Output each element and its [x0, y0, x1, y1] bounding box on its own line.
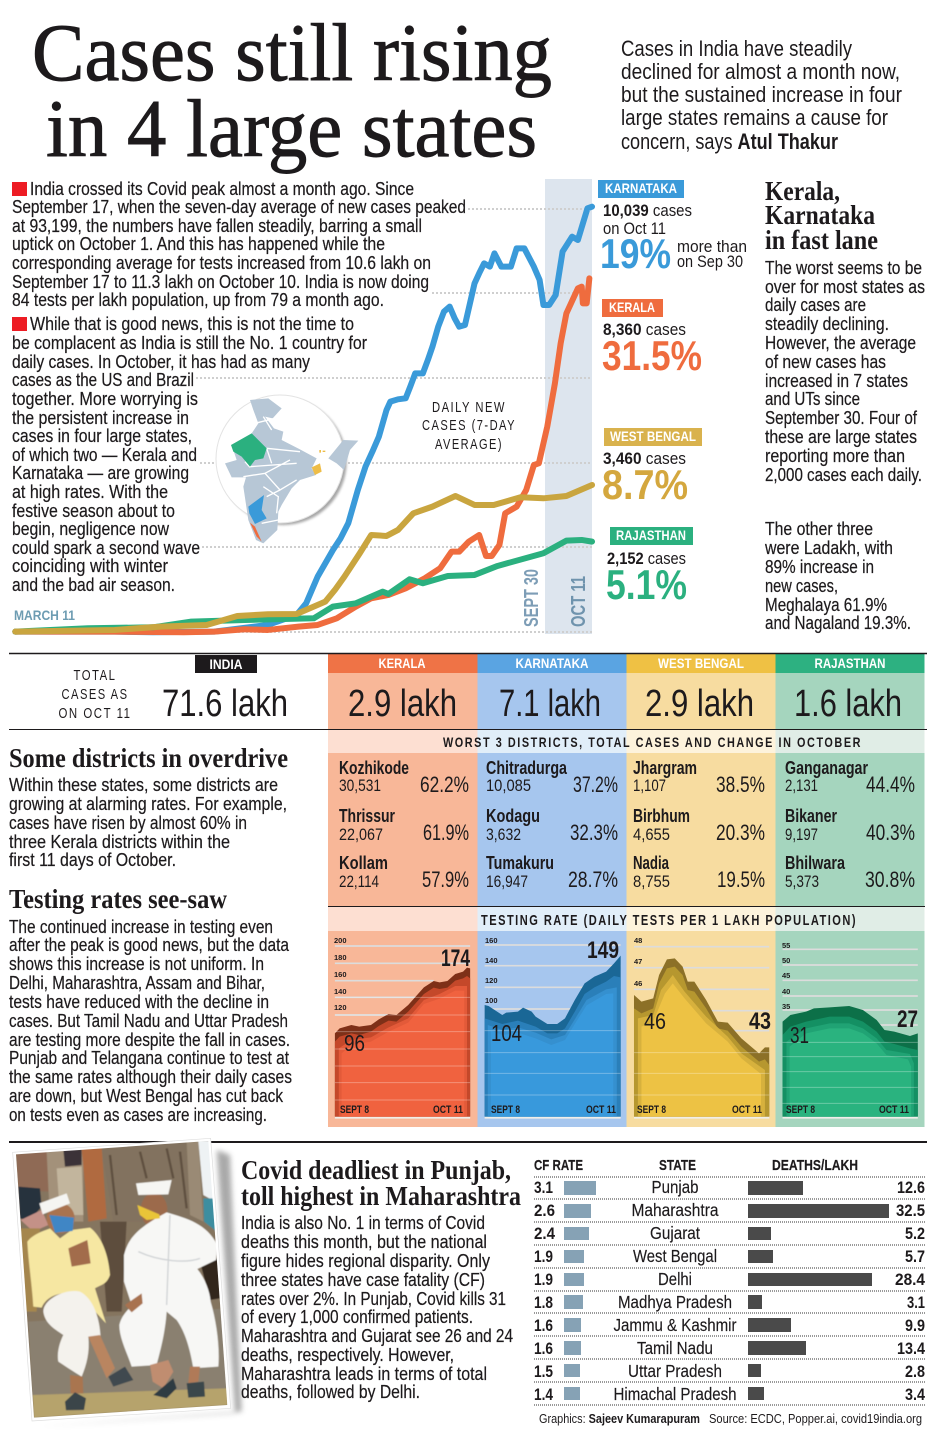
text block: body copy 1: India crossed its Covid peak almost a month ago. Since — [30, 179, 414, 199]
text block: testing rates: cases. But Tamil Nadu and Uttar Pradesh — [9, 1011, 288, 1031]
coloured table background — [328, 653, 924, 1127]
total cases row label — [58, 667, 132, 722]
India tag and total: 71.6 lakh — [162, 683, 288, 725]
heading: Covid deadliest in Punjab: Covid deadliest in Punjab, — [241, 1155, 511, 1185]
area chart: Kerala testing rate: 200 — [334, 936, 347, 945]
table header — [534, 1157, 858, 1174]
district list: Rajasthan: 2,131 — [785, 776, 818, 795]
district list: West Bengal: Jhargram — [633, 758, 697, 778]
district list: West Bengal: 19.5% — [717, 867, 765, 892]
side text: fast lane body: these are large states — [765, 427, 917, 447]
district list: West Bengal: 20.3% — [716, 820, 765, 845]
text block: body copy 2: and the bad air season. — [12, 575, 175, 595]
state names: Punjab — [652, 1177, 698, 1197]
deaths values: 28.4 — [895, 1270, 925, 1289]
heading: testing rates see-saw: Testing rates see-saw — [9, 884, 227, 914]
district list: Rajasthan: 40.3% — [866, 820, 915, 845]
table header: CF RATE — [534, 1157, 583, 1174]
CF rate values: 1.9 — [534, 1247, 553, 1266]
district list: Karnataka: 28.7% — [568, 867, 618, 892]
text block: body copy 2: be complacent as India is still the No. 1 country for — [12, 333, 367, 353]
district list: Karnataka: Chitradurga — [486, 758, 568, 778]
text block: testing rates: The continued increase in testing even — [9, 917, 273, 937]
total cases row label: CASES AS — [62, 686, 128, 703]
callout: Rajasthan — [606, 527, 693, 608]
area chart: Karnataka testing rate: 120 — [485, 976, 498, 985]
heading: some districts in overdrive: Some districts in overdrive — [9, 743, 288, 773]
table header: DEATHS/LAKH — [772, 1157, 858, 1174]
callout: Karnataka: 10,039 cases — [603, 201, 692, 220]
title: Cases still rising — [32, 7, 552, 98]
text block: Covid deaths: figure hides regional disparity. Only — [241, 1251, 490, 1271]
district list: Kerala: Kollam — [339, 853, 388, 873]
India tag and total: INDIA — [210, 656, 242, 672]
text block: some districts: cases have risen by almost 60% in — [9, 813, 247, 833]
callout: Rajasthan: 5.1% — [606, 561, 687, 608]
text block: body copy 1: uptick on October 1. And this has happened while the — [12, 234, 385, 254]
side text: other three: 89% increase in — [765, 557, 874, 577]
CF rate values: 1.6 — [534, 1316, 553, 1335]
heading: Covid deadliest in Punjab: toll highest in Maharashtra — [241, 1181, 521, 1211]
area chart: West Bengal testing rate: 48 — [634, 936, 642, 945]
text block: Covid deaths: India is also No. 1 in terms of Covid — [241, 1213, 485, 1233]
text block: testing rates: after the peak is good news, but the data — [9, 935, 290, 955]
area chart: Karnataka testing rate: SEPT 8 — [491, 1104, 520, 1116]
area chart: Rajasthan testing rate — [782, 941, 918, 1119]
text block: body copy 2: coinciding with winter — [12, 556, 168, 576]
deaths bars — [748, 1181, 889, 1400]
area chart: Kerala testing rate: 140 — [334, 987, 347, 996]
side heading: Kerala, Karnataka in fast lane: Kerala, — [765, 176, 840, 206]
text block: body copy 2: While that is good news, this is not the time to — [30, 314, 354, 334]
text block: Covid deaths: deaths this month, but the national — [241, 1232, 487, 1252]
callout: West Bengal: 8.7% — [602, 461, 688, 508]
side text: fast lane body: increased in 7 states — [765, 371, 908, 391]
callout: Rajasthan: RAJASTHAN — [616, 527, 686, 543]
district list: Rajasthan: 44.4% — [866, 772, 915, 797]
text block: Covid deaths: rates over 2%. In Punjab, Covid kills 31 — [241, 1289, 506, 1309]
district list: Rajasthan: Ganganagar — [785, 758, 868, 778]
text block: body copy 2 — [12, 314, 367, 595]
text block: body copy 2: begin, negligence now — [12, 519, 170, 539]
area chart: Rajasthan testing rate: SEPT 8 — [786, 1104, 815, 1116]
text block: body copy 1: corresponding average for tests increased from 10.6 lakh on — [12, 253, 431, 273]
callout: Kerala: KERALA — [609, 299, 655, 315]
chart band: Sept 30 to Oct 11 — [545, 179, 592, 634]
area chart: West Bengal testing rate: 46 — [634, 979, 642, 988]
state column: Kerala header: 2.9 lakh — [348, 683, 457, 725]
intro text: declined for almost a month now, — [621, 59, 900, 84]
line chart: daily new cases — [15, 207, 592, 632]
district list: Karnataka: 3,632 — [486, 825, 521, 844]
text block: Covid deaths — [241, 1213, 513, 1402]
table: CF rate and deaths per lakh — [534, 1157, 925, 1405]
area chart: Rajasthan testing rate: 31 — [790, 1022, 809, 1048]
CF rate bars — [564, 1181, 596, 1400]
text block: Covid deaths: Maharashtra and Gujarat see 26 and 24 — [241, 1326, 513, 1346]
state names: Tamil Nadu — [637, 1338, 713, 1358]
text block: Covid deaths: deaths, respectively. However, — [241, 1345, 454, 1365]
district list: Karnataka: 10,085 — [486, 776, 531, 795]
area chart: Karnataka testing rate: 104 — [491, 1020, 522, 1046]
text block: body copy 2: together. More worrying is — [12, 389, 198, 409]
callout: West Bengal: WEST BENGAL — [610, 428, 696, 444]
callout: Karnataka: on Oct 11 — [603, 219, 666, 238]
icon: India map locator — [216, 395, 358, 543]
area chart: Rajasthan testing rate: 40 — [782, 987, 790, 996]
district list: West Bengal: 1,107 — [633, 776, 666, 795]
text block: Covid deaths: of every 1,000 confirmed patients. — [241, 1307, 473, 1327]
text block: body copy 2: Karnataka — are growing — [12, 463, 189, 483]
chart title: daily new cases: CASES (7-DAY — [422, 417, 516, 434]
table rules — [9, 654, 927, 906]
text block: body copy 2: of which two — Kerala and — [12, 445, 197, 465]
state column: Kerala header — [348, 655, 457, 725]
state names: Uttar Pradesh — [628, 1361, 722, 1381]
area chart: Karnataka testing rate: 100 — [485, 996, 498, 1005]
district list: Karnataka: Kodagu — [486, 806, 540, 826]
text block: body copy 2: cases as the US and Brazil — [12, 370, 194, 390]
district list: Karnataka — [486, 758, 618, 892]
district list: Kerala: 30,531 — [339, 776, 381, 795]
area chart: Kerala testing rate: 174 — [441, 945, 470, 972]
state column: Kerala header: KERALA — [378, 655, 426, 671]
area chart: Rajasthan testing rate: 35 — [782, 1002, 790, 1011]
chart title: daily new cases — [422, 399, 516, 453]
text block: some districts: growing at alarming rates. For example, — [9, 794, 287, 814]
CF rate values: 1.4 — [534, 1385, 553, 1404]
deaths values: 5.2 — [905, 1224, 925, 1243]
chart axis label: Sept 30: SEPT 30 — [521, 569, 543, 627]
side text: other three: Meghalaya 61.9% — [765, 595, 887, 615]
side text: fast lane body: steadily declining. — [765, 314, 889, 334]
state names: West Bengal — [633, 1246, 717, 1266]
state column: Rajasthan header: 1.6 lakh — [794, 683, 902, 725]
callout: West Bengal: 3,460 cases — [603, 449, 686, 468]
bullet — [12, 182, 27, 196]
state names: Himachal Pradesh — [614, 1384, 736, 1404]
district list: Rajasthan — [785, 758, 915, 892]
side text: other three: were Ladakh, with — [764, 538, 893, 558]
text block: testing rates: on tests even as cases are increasing. — [9, 1105, 267, 1125]
text block: some districts — [9, 775, 287, 870]
area chart: Kerala testing rate: 160 — [334, 970, 347, 979]
state column: West Bengal header — [645, 655, 754, 725]
text block: testing rates: are down, but West Bengal has cut back — [9, 1086, 284, 1106]
district list: Karnataka: 32.3% — [570, 820, 618, 845]
text block: body copy 2: cases in four large states, — [12, 426, 192, 446]
text block: testing rates: tests have reduced with the decline in — [9, 992, 269, 1012]
text block: some districts: three Kerala districts within the — [9, 832, 230, 852]
area chart: West Bengal testing rate: 46 — [644, 1008, 666, 1034]
state column: West Bengal header: 2.9 lakh — [645, 683, 754, 725]
district list: Rajasthan: 9,197 — [785, 825, 818, 844]
text block: testing rates: shows this increase is not uniform. In — [9, 954, 264, 974]
CF rate values: 1.5 — [534, 1362, 553, 1381]
district list: West Bengal: 4,655 — [633, 825, 670, 844]
text block: Covid deaths: Maharashtra leads in terms of total — [241, 1364, 487, 1384]
table header: STATE — [659, 1157, 696, 1174]
area chart: Rajasthan testing rate: 45 — [782, 971, 790, 980]
area chart: Rajasthan testing rate: 50 — [782, 956, 790, 965]
area chart: Kerala testing rate: 180 — [334, 953, 347, 962]
side text: fast lane body: of new cases has — [765, 352, 886, 372]
state column: Rajasthan header — [794, 655, 902, 725]
text block: body copy 2: daily cases. In October, it has had as many — [12, 352, 310, 372]
text block: testing rates: Delhi, Maharashtra, Assam and Bihar, — [9, 973, 265, 993]
district list: Kerala: Kozhikode — [339, 758, 409, 778]
district list: Karnataka: 16,947 — [486, 872, 528, 891]
text block: some districts: Within these states, some districts are — [9, 775, 278, 795]
area chart: Rajasthan testing rate: 55 — [782, 941, 790, 950]
district list: Kerala: 22,114 — [339, 872, 379, 891]
text block: some districts: first 11 days of October. — [9, 850, 176, 870]
state names: Delhi — [658, 1269, 692, 1289]
CF rate values: 1.6 — [534, 1339, 553, 1358]
text block: testing rates: Punjab and Telangana continue to test at — [9, 1048, 289, 1068]
district list: West Bengal: Birbhum — [633, 806, 690, 826]
chart axis label: Oct 11: OCT 11 — [568, 576, 590, 627]
state names: Gujarat — [650, 1223, 700, 1243]
state names: Jammu & Kashmir — [614, 1315, 737, 1335]
India tag and total — [162, 655, 288, 725]
callout: Kerala: 31.5% — [602, 332, 702, 379]
district list: Kerala: 57.9% — [422, 867, 469, 892]
intro text: large states remains a cause for — [621, 105, 888, 130]
intro text: concern, says Atul Thakur — [621, 129, 838, 154]
area chart: West Bengal testing rate: 43 — [749, 1008, 771, 1035]
callout: Karnataka: more than — [677, 237, 747, 256]
side heading: Kerala, Karnataka in fast lane: Karnataka — [765, 200, 875, 230]
CF rate values: 2.6 — [534, 1201, 555, 1220]
CF rate values: 1.9 — [534, 1270, 553, 1289]
section rule — [9, 1141, 927, 1143]
deaths values — [895, 1178, 925, 1404]
side heading: Kerala, Karnataka in fast lane — [765, 176, 878, 255]
side heading: Kerala, Karnataka in fast lane: in fast lane — [765, 225, 878, 255]
area chart: Karnataka testing rate: 140 — [485, 956, 498, 965]
side text: other three: new cases, — [765, 576, 838, 596]
area chart: Kerala testing rate — [334, 936, 470, 1119]
deaths values: 5.7 — [905, 1247, 925, 1266]
callout: West Bengal — [602, 428, 702, 508]
deaths values: 2.8 — [905, 1362, 925, 1381]
bullet — [12, 317, 27, 331]
callout: Karnataka: on Sep 30 — [677, 252, 743, 271]
chart axis label: March 11: MARCH 11 — [14, 607, 75, 623]
text block: testing rates: are testing more despite the fall in cases. — [9, 1030, 290, 1050]
area chart: Karnataka testing rate: 160 — [485, 936, 498, 945]
district list: Kerala: 61.9% — [423, 820, 469, 845]
text block: body copy 2: could spark a second wave — [12, 538, 200, 558]
side text: fast lane body: reporting more than — [765, 446, 905, 466]
text block: body copy 1: at 93,199, the numbers have fallen steadily, barring a small — [12, 216, 422, 236]
text block: testing rates — [9, 917, 292, 1125]
side text: other three: The other three — [765, 519, 873, 539]
text block: testing rates: the same rates although their daily cases — [9, 1067, 292, 1087]
CF rate values: 3.1 — [534, 1178, 553, 1197]
deaths values: 3.1 — [907, 1293, 925, 1312]
area chart: Karnataka testing rate: OCT 11 — [586, 1104, 616, 1116]
side text: fast lane body: daily cases are — [765, 295, 866, 315]
state column: Rajasthan header: RAJASTHAN — [814, 655, 886, 671]
text block: body copy 2: festive season about to — [12, 501, 175, 521]
area chart: Kerala testing rate: 120 — [334, 1003, 347, 1012]
district list: West Bengal: 8,755 — [633, 872, 670, 891]
credits: Graphics: Sajeev Kumarapuram — [539, 1411, 700, 1426]
side text: fast lane body — [765, 258, 925, 485]
text block: body copy 1: September 17, when the seven-day average of new cases peaked — [12, 197, 466, 217]
deaths values: 13.4 — [897, 1339, 925, 1358]
credits — [539, 1411, 922, 1426]
district list: Kerala: 62.2% — [420, 772, 469, 797]
side text: other three: and Nagaland 19.3%. — [765, 613, 911, 633]
text block: body copy 2: at high rates. With the — [12, 482, 168, 502]
text block: body copy 1: 84 tests per lakh population, up from 79 a month ago. — [12, 290, 384, 310]
callout: Karnataka: 19% — [600, 230, 671, 277]
state names — [614, 1177, 737, 1404]
deaths values: 9.9 — [905, 1316, 925, 1335]
intro text: Cases in India have steadily — [621, 36, 852, 61]
title: in 4 large states — [46, 83, 537, 174]
district list: Karnataka: 37.2% — [573, 772, 618, 797]
total cases row label: TOTAL — [74, 667, 116, 684]
district list: Rajasthan: Bhilwara — [785, 853, 846, 873]
area chart: West Bengal testing rate: OCT 11 — [732, 1104, 762, 1116]
district list: Kerala: Thrissur — [339, 806, 395, 826]
state column: Karnataka header: 7.1 lakh — [499, 683, 601, 725]
text block: body copy 2: the persistent increase in — [12, 408, 189, 428]
text block: body copy 1: September 17 to 11.3 lakh on October 10. India is now doing — [12, 272, 429, 292]
deaths values: 3.4 — [905, 1385, 925, 1404]
state column: Karnataka header — [499, 655, 601, 725]
CF rate values: 1.8 — [534, 1293, 553, 1312]
state names: Maharashtra — [632, 1200, 719, 1220]
CF rate values: 2.4 — [534, 1224, 555, 1243]
district list: Rajasthan: 5,373 — [785, 872, 819, 891]
callout: Rajasthan: 2,152 cases — [607, 549, 686, 568]
district list: Karnataka: Tumakuru — [486, 853, 554, 873]
district list: Rajasthan: 30.8% — [865, 867, 915, 892]
district list: West Bengal — [633, 758, 765, 892]
area chart: Rajasthan testing rate: OCT 11 — [879, 1104, 909, 1116]
area chart: Kerala testing rate: 96 — [344, 1030, 365, 1056]
title — [32, 7, 552, 174]
area chart: Kerala testing rate: SEPT 8 — [340, 1104, 369, 1116]
area chart: West Bengal testing rate: SEPT 8 — [637, 1104, 666, 1116]
CF rate values — [534, 1178, 555, 1404]
district list: Rajasthan: Bikaner — [785, 806, 837, 826]
side text: fast lane body: and UTs since — [765, 389, 860, 409]
area chart: West Bengal testing rate — [634, 936, 771, 1119]
text block: Covid deaths: deaths, followed by Delhi. — [241, 1382, 420, 1402]
callout: Karnataka — [598, 180, 747, 277]
area chart: Karnataka testing rate — [485, 936, 621, 1119]
area chart: West Bengal testing rate: 47 — [634, 957, 642, 966]
total cases row label: ON OCT 11 — [58, 705, 132, 722]
chart title: daily new cases: AVERAGE) — [435, 436, 503, 453]
callout: Kerala: 8,360 cases — [603, 320, 686, 339]
deaths values: 12.6 — [897, 1178, 925, 1197]
callout: Kerala — [602, 299, 702, 379]
text block: body copy 1 — [12, 179, 466, 310]
state column: Karnataka header: KARNATAKA — [516, 655, 588, 671]
area chart: Rajasthan testing rate: 27 — [897, 1006, 918, 1033]
text block: Covid deaths: three states have case fatality (CF) — [241, 1270, 485, 1290]
intro text — [621, 36, 902, 154]
state names: Madhya Pradesh — [618, 1292, 732, 1312]
chart title: daily new cases: DAILY NEW — [432, 399, 506, 416]
district list: West Bengal: 38.5% — [716, 772, 765, 797]
state column: West Bengal header: WEST BENGAL — [658, 655, 744, 671]
side text: other three — [764, 519, 911, 633]
district list: West Bengal: Nadia — [633, 853, 670, 873]
heading: Covid deadliest in Punjab — [241, 1155, 521, 1211]
deaths values: 32.5 — [896, 1201, 925, 1220]
district list: Kerala — [339, 758, 469, 892]
district list: Kerala: 22,067 — [339, 825, 383, 844]
photo: two men in masks talking — [10, 1135, 242, 1427]
area chart: Karnataka testing rate: 149 — [587, 937, 619, 964]
area chart: Kerala testing rate: OCT 11 — [433, 1104, 463, 1116]
chart gridlines group — [14, 209, 592, 632]
callout: Karnataka: KARNATAKA — [605, 180, 677, 196]
